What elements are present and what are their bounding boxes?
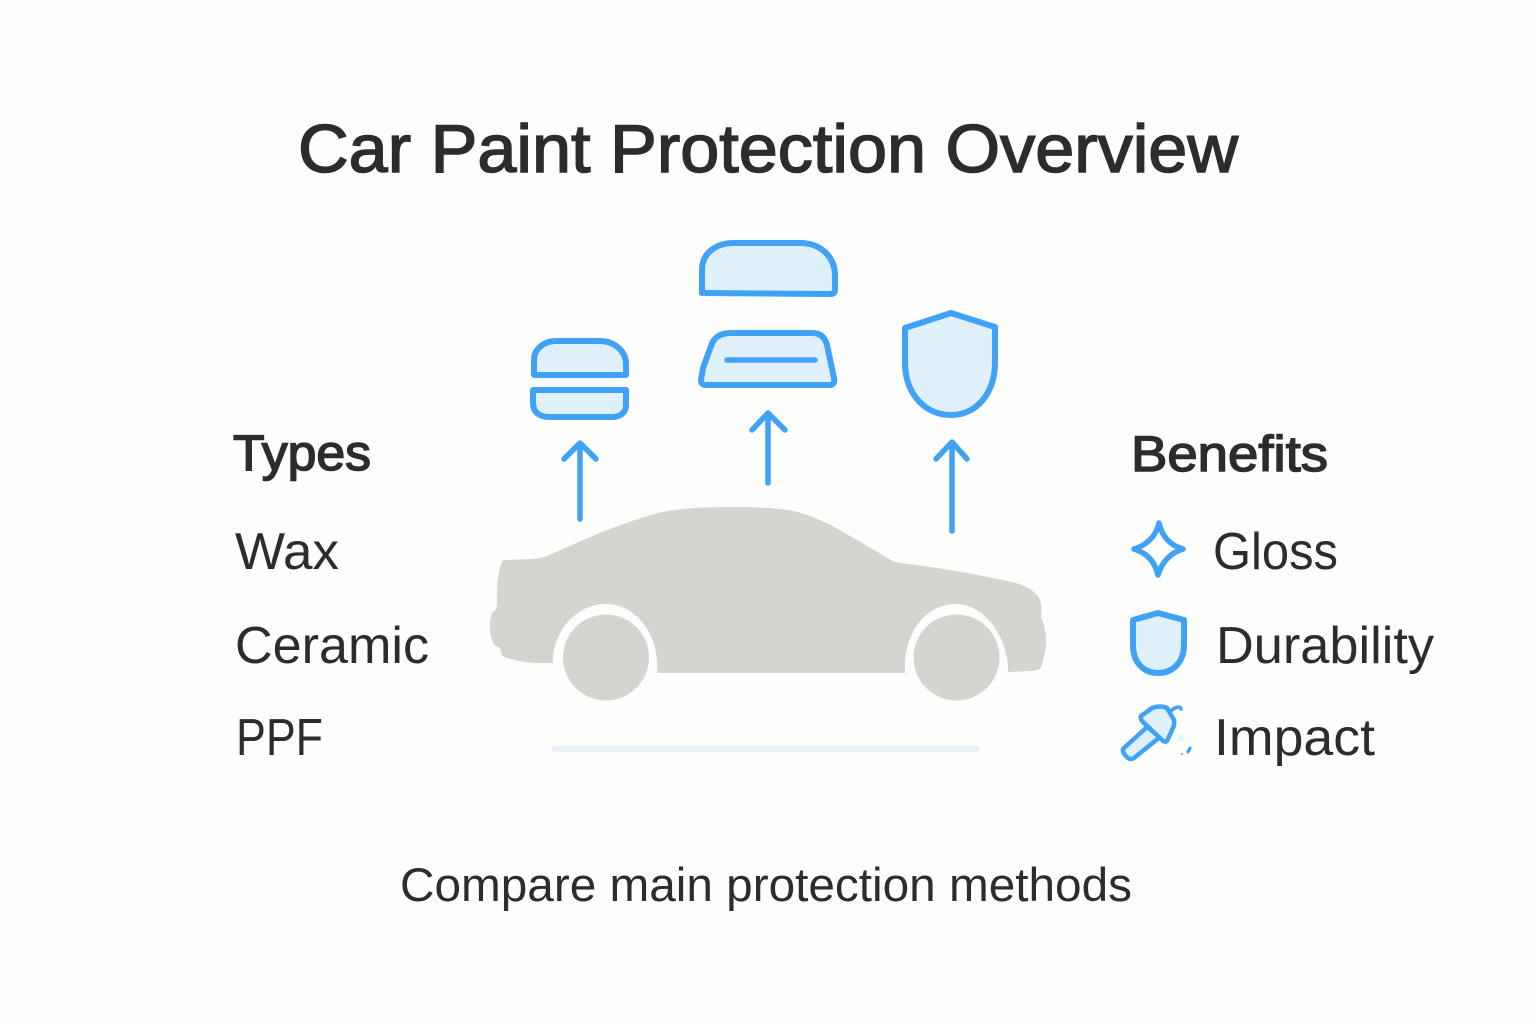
icon: PPF shield xyxy=(905,313,995,415)
ground shadow xyxy=(551,746,980,752)
type: PPF: PPF xyxy=(236,709,323,767)
panel: benefits list xyxy=(1123,426,1434,767)
arrow: wax xyxy=(564,443,596,519)
benefit: gloss: Gloss xyxy=(1213,523,1338,581)
arrow: PPF xyxy=(936,442,967,531)
icon: durability shield xyxy=(1133,613,1184,673)
wheel: front xyxy=(914,614,1000,700)
wheel: rear xyxy=(563,614,649,700)
type: ceramic: Ceramic xyxy=(235,617,429,675)
footer caption: Compare main protection methods xyxy=(400,858,1132,911)
car silhouette xyxy=(490,507,1046,700)
heading: benefits: Benefits xyxy=(1131,426,1328,482)
icon: impact hammer xyxy=(1123,706,1193,759)
icon: ceramic layers xyxy=(701,243,835,385)
panel: types list xyxy=(233,425,429,767)
heading: types: Types xyxy=(233,425,371,481)
arrow: ceramic xyxy=(752,413,785,483)
title: Car Paint Protection Overview xyxy=(298,111,1239,187)
icon: gloss sparkle xyxy=(1134,523,1183,575)
benefit: impact: Impact xyxy=(1214,709,1376,767)
type: wax: Wax xyxy=(235,523,339,581)
benefit: durability: Durability xyxy=(1216,617,1434,675)
icon: wax layers xyxy=(533,341,626,417)
